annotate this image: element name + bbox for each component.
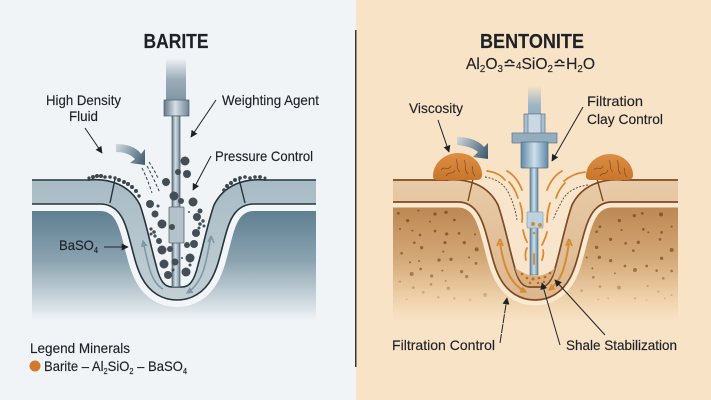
orange flow strokes — [487, 171, 585, 264]
falling particle streaks — [142, 162, 160, 193]
dashed fluid paths — [485, 177, 588, 220]
drill string — [512, 85, 557, 275]
label: viscosity — [409, 100, 463, 152]
label: weighting agent: Weighting Agent — [222, 92, 319, 108]
icon: curved flow arrow — [457, 137, 488, 159]
label: BaSO4 — [59, 237, 128, 255]
label: BaSO4: 4 — [94, 246, 99, 255]
icon: curved flow arrow — [116, 144, 145, 165]
title: barite: BARITE — [144, 31, 208, 53]
label: weighting agent — [191, 92, 319, 137]
legend: – BaSO — [134, 358, 183, 374]
soil lower body — [393, 206, 678, 322]
chemical formula: O — [485, 56, 498, 73]
circulation arrows — [143, 236, 214, 293]
legend: SiO — [108, 358, 129, 374]
legend: 4 — [183, 367, 188, 376]
drill pipe — [164, 58, 189, 287]
orange circulation arrows — [497, 239, 572, 292]
rock formation lower body — [32, 211, 316, 321]
panel: bentonite — [392, 31, 678, 353]
label: filtration clay control: Clay Control — [587, 111, 663, 127]
legend swatch: barite — [30, 360, 40, 372]
label: filtration control — [392, 298, 507, 353]
panel: barite background — [0, 0, 356, 400]
chemical formula: 3 — [498, 64, 503, 75]
mineral mound: right — [586, 154, 633, 180]
panel: barite — [30, 31, 319, 376]
legend: Barite – Al — [44, 358, 108, 374]
label: pressure control — [193, 148, 313, 190]
chemical formula: 2 — [577, 64, 583, 75]
label: shale stabilization — [542, 280, 677, 353]
wellbore cross-section — [32, 179, 316, 300]
label: high density fluid — [46, 92, 121, 153]
label: high density fluid: Fluid — [69, 108, 98, 124]
label: viscosity: Viscosity — [409, 100, 463, 116]
soil speckle — [397, 210, 674, 301]
mineral mound: left — [433, 153, 482, 180]
label: filtration control: Filtration Control — [392, 337, 495, 353]
label: high density fluid: High Density — [46, 92, 121, 108]
label: pressure control: Pressure Control — [215, 148, 313, 164]
chemical formula: H — [566, 56, 577, 73]
label: BaSO4: BaSO — [59, 237, 96, 253]
panel: bentonite background — [356, 0, 711, 400]
label: filtration clay control: Filtration — [587, 93, 643, 109]
barite particles — [146, 156, 206, 279]
label: shale stabilization: Shale Stabilization — [566, 337, 677, 353]
chemical formula: 2 — [480, 64, 486, 75]
chemical formula: ≏ — [503, 54, 516, 73]
chemical formula: O — [583, 56, 595, 73]
legend: 2 — [129, 367, 134, 376]
chemical formula: 4SiO — [516, 56, 548, 73]
label: filtration clay control — [552, 93, 663, 161]
legend — [30, 340, 188, 376]
title: bentonite: BENTONITE — [480, 31, 584, 53]
rock debris on crest — [87, 174, 267, 198]
chemical formula: 2 — [548, 64, 553, 75]
sediment at well bottom — [515, 268, 555, 286]
chemical formula: Al — [466, 56, 480, 73]
wellbore cross-section — [393, 179, 678, 300]
legend: Legend Minerals — [30, 340, 130, 356]
center divider — [355, 30, 356, 367]
chemical formula: ≏ — [553, 54, 566, 73]
legend: 2 — [103, 367, 108, 376]
